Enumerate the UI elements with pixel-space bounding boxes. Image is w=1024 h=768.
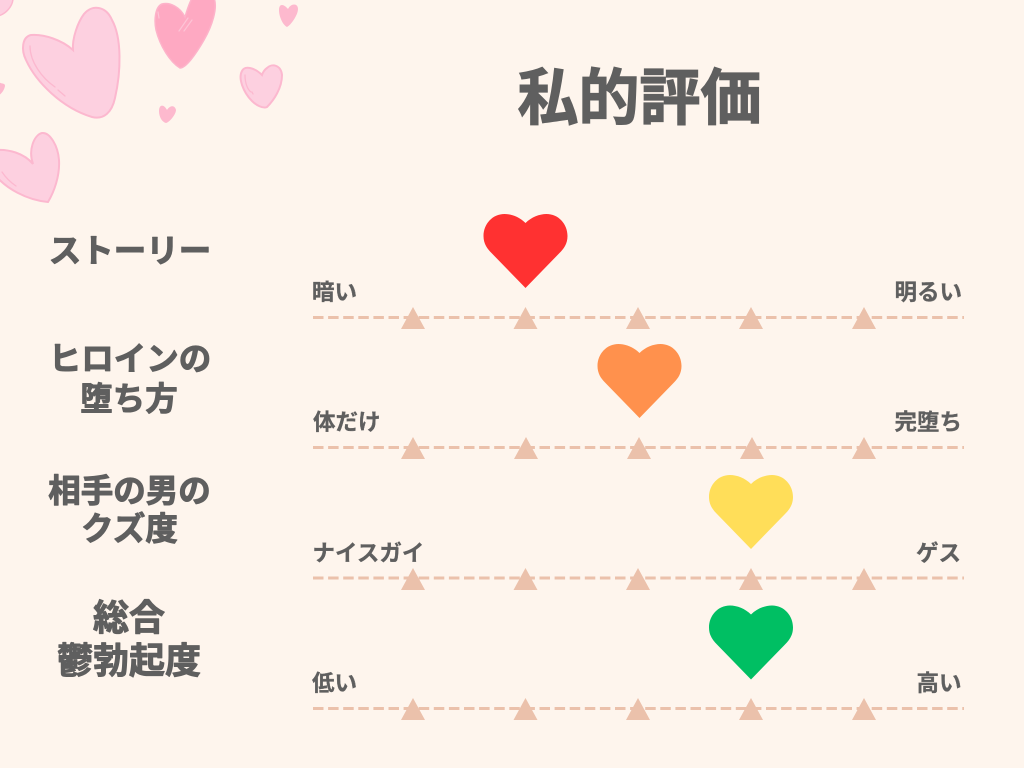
icon: pink heart top <box>155 0 215 68</box>
scale: right label: 完堕ち <box>894 410 962 435</box>
scale: right label: 明るい <box>894 280 962 305</box>
scale: left label: 暗い <box>312 280 357 305</box>
scale line <box>313 568 964 590</box>
row: 総合鬱勃起度 <box>57 597 964 720</box>
heart marker: red <box>484 214 568 288</box>
icon: cut-off heart top-left corner <box>0 0 13 16</box>
scale: right label: ゲス <box>916 541 961 566</box>
scale line <box>313 307 964 329</box>
row label: 鬱勃起度 <box>57 640 201 681</box>
scale line <box>313 437 964 459</box>
icon: heart lower left <box>0 133 59 202</box>
heart marker: orange <box>598 344 682 418</box>
scale: right label: 高い <box>916 671 962 696</box>
scale: left label: ナイスガイ <box>312 541 424 566</box>
scale: left label: 低い <box>312 671 357 696</box>
row label: ヒロインの <box>49 341 211 377</box>
scale: left label: 体だけ <box>313 410 381 435</box>
row: 相手の男のクズ度 <box>48 473 964 590</box>
row label: ストーリー <box>49 233 211 269</box>
row label: クズ度 <box>81 510 178 547</box>
icon: cut-off heart left edge <box>0 81 5 96</box>
row: ストーリー <box>49 214 964 329</box>
row label: 相手の男の <box>48 473 211 509</box>
decorative pink hearts <box>0 0 298 202</box>
row label: 総合 <box>93 597 165 638</box>
row label: 堕ち方 <box>80 381 178 417</box>
icon: tiny heart <box>159 106 176 123</box>
row: ヒロインの堕ち方 <box>49 341 964 459</box>
heart marker: green <box>709 606 793 680</box>
icon: medium pale heart <box>241 65 282 108</box>
icon: large pink heart <box>23 8 120 118</box>
scale line <box>313 698 964 720</box>
title: 私的評価 <box>517 64 762 132</box>
heart marker: yellow <box>709 475 793 549</box>
icon: small heart top right <box>279 4 298 27</box>
